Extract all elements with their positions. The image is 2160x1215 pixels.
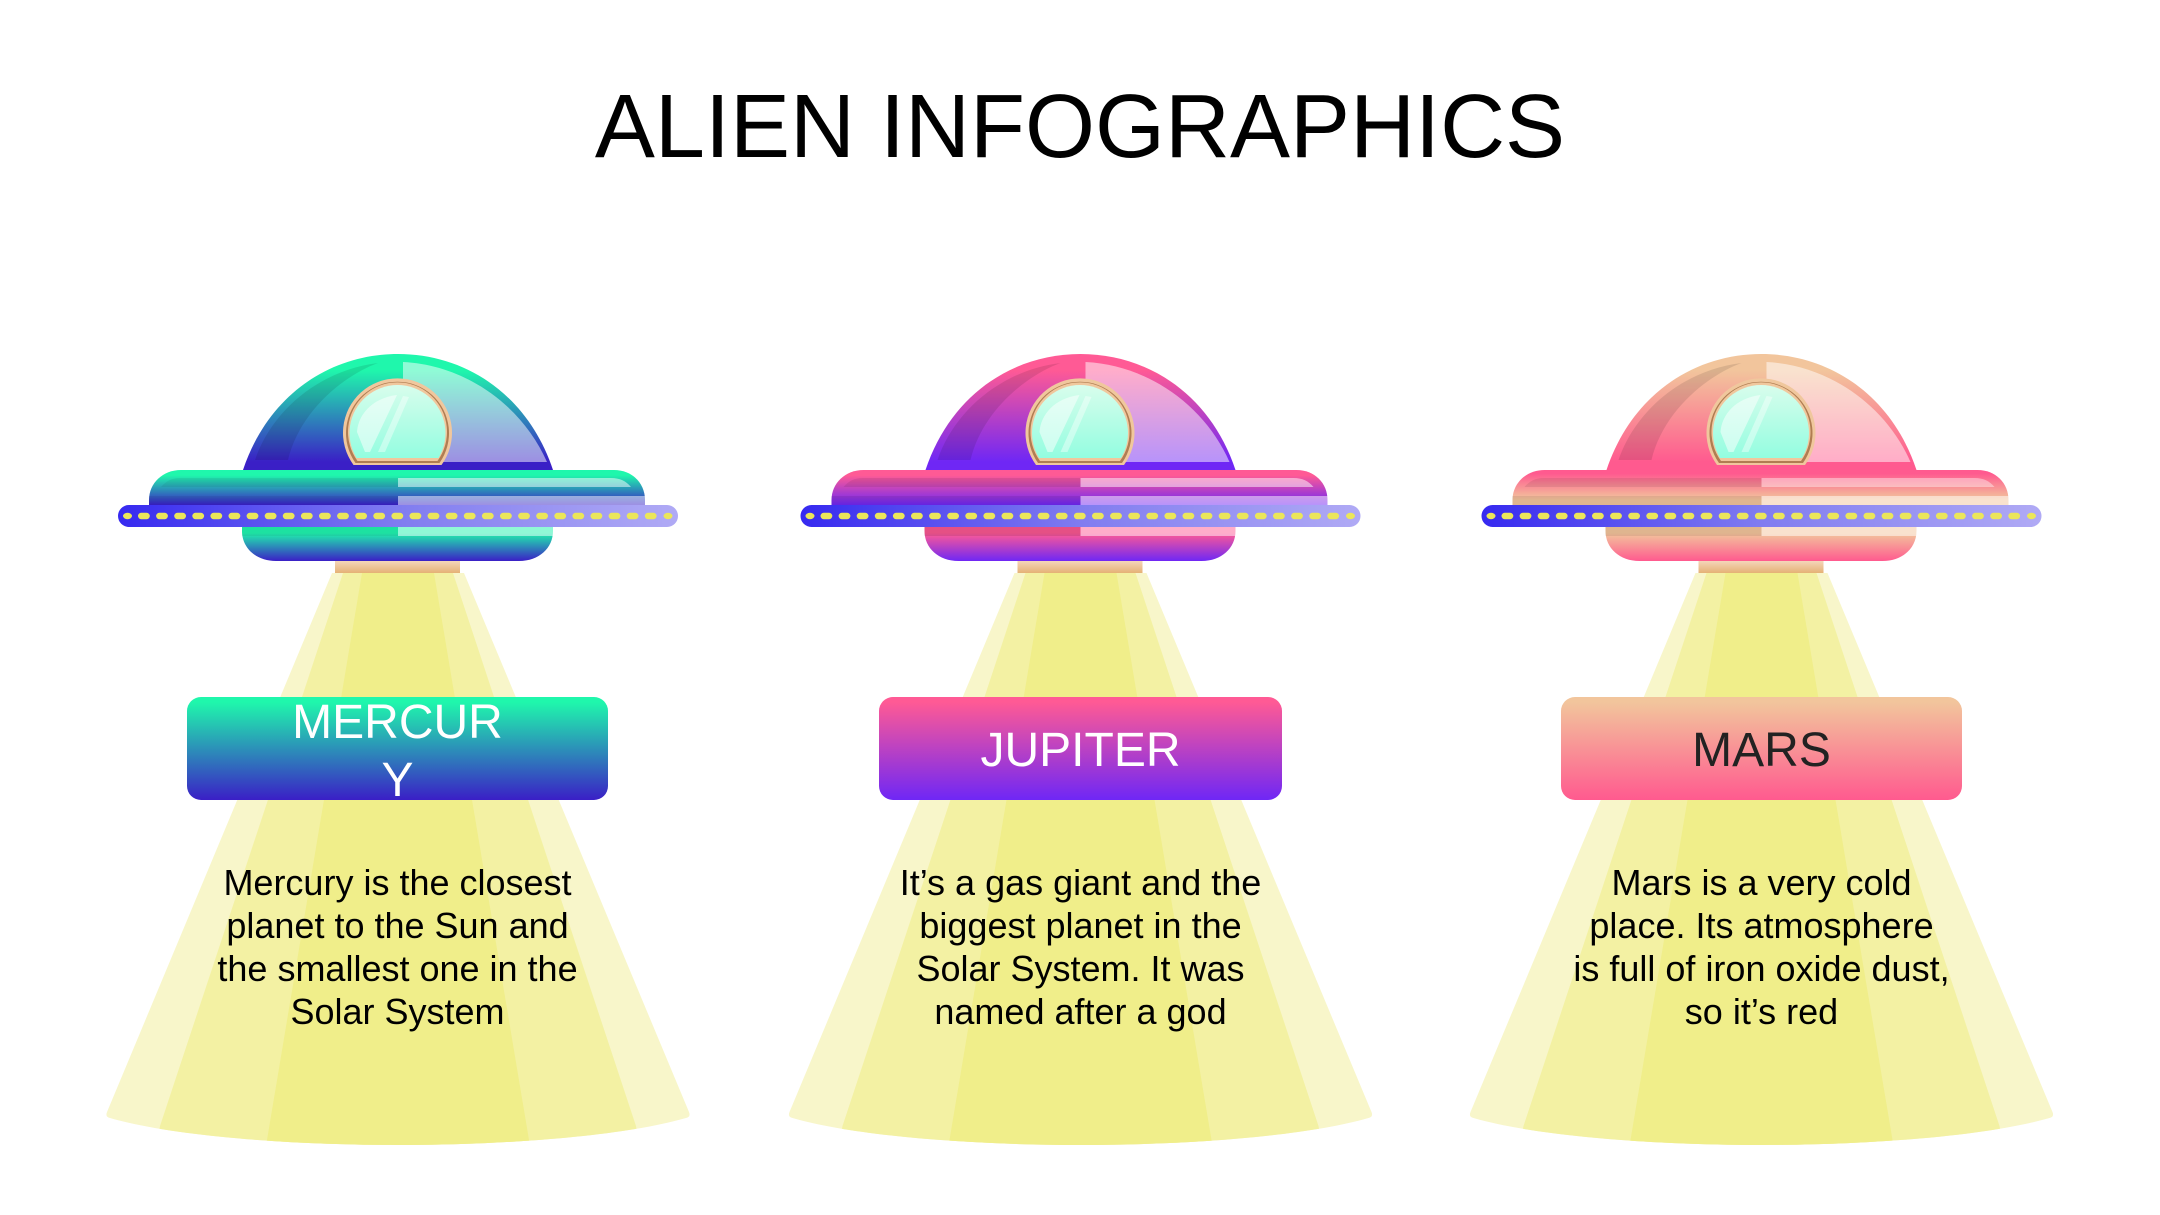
ufo dome xyxy=(926,354,1236,470)
text: mars description xyxy=(1573,862,1950,1032)
light beam: jupiter xyxy=(782,570,1382,1150)
text: jupiter description: It’s a gas giant and the xyxy=(900,862,1261,903)
ufo window xyxy=(343,378,452,465)
text: mercury description: Solar System xyxy=(290,991,505,1032)
label: mars: MARS xyxy=(1692,724,1831,777)
title: ALIEN INFOGRAPHICS xyxy=(595,77,1565,177)
ufo lamp xyxy=(1698,561,1824,573)
text: mercury description: Mercury is the closest xyxy=(223,862,572,903)
ufo disc xyxy=(149,470,646,505)
text: mars description: is full of iron oxide dust, xyxy=(1573,948,1950,989)
text: mercury description xyxy=(217,862,578,1032)
ufo dome xyxy=(1606,354,1916,470)
ufo: mercury xyxy=(118,354,678,573)
panel: jupiter xyxy=(782,354,1382,1150)
text: mars description: Mars is a very cold xyxy=(1611,862,1912,903)
ufo disc xyxy=(832,470,1328,505)
label: jupiter xyxy=(879,697,1282,800)
ufo light rail xyxy=(1482,505,2042,527)
label: mercury: Y xyxy=(381,754,414,807)
light beam: mercury xyxy=(100,570,700,1150)
label: mercury xyxy=(187,696,608,807)
ufo lamp xyxy=(1018,561,1142,573)
ufo window xyxy=(1026,378,1134,465)
light beam: mars xyxy=(1464,570,2064,1150)
ufo disc xyxy=(1512,470,2010,505)
panel: mercury xyxy=(100,354,700,1150)
panel: mars xyxy=(1464,354,2064,1150)
text: mercury description: the smallest one in the xyxy=(217,948,578,989)
ufo light rail xyxy=(800,505,1360,527)
text: mars description: place. Its atmosphere xyxy=(1589,905,1934,946)
ufo: mars xyxy=(1482,354,2042,573)
ufo dome xyxy=(243,354,553,470)
ufo window xyxy=(1706,378,1816,465)
text: mercury description: planet to the Sun and xyxy=(226,905,569,946)
label: mars xyxy=(1561,697,1962,800)
text: jupiter description: Solar System. It was xyxy=(916,948,1245,989)
text: mars description: so it’s red xyxy=(1685,991,1838,1032)
ufo lamp xyxy=(335,561,460,573)
ufo lower hull xyxy=(924,505,1236,561)
ufo lower hull xyxy=(1606,505,1916,561)
ufo light rail xyxy=(118,505,678,527)
label: mercury: MERCUR xyxy=(292,696,503,749)
ufo lower hull xyxy=(242,505,553,561)
text: jupiter description: named after a god xyxy=(934,991,1227,1032)
text: jupiter description: biggest planet in the xyxy=(919,905,1242,946)
text: jupiter description xyxy=(900,862,1261,1032)
ufo: jupiter xyxy=(800,354,1360,573)
label: jupiter: JUPITER xyxy=(980,724,1181,777)
